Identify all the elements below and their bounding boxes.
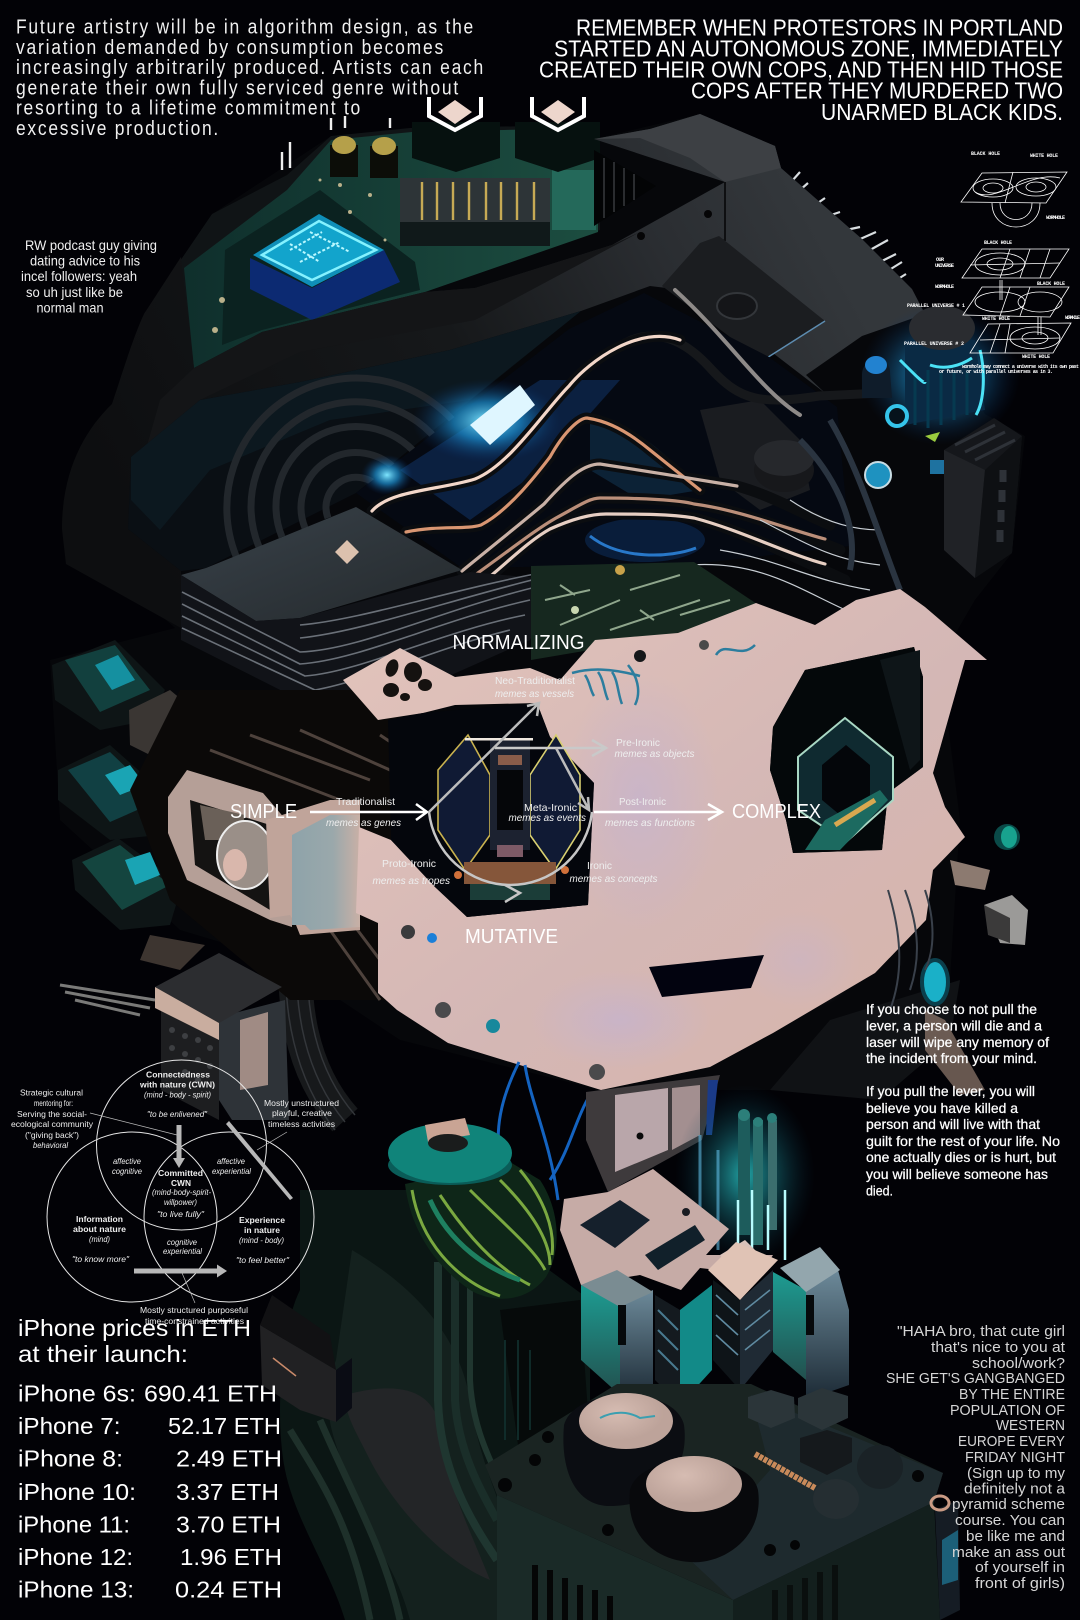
stage labels: memes as functions: [605, 817, 696, 829]
text: haha quote: BY THE ENTIRE: [959, 1386, 1065, 1403]
blue cap: [862, 356, 892, 398]
venn labels: willpower): [164, 1198, 197, 1207]
axis labels: SIMPLE: [230, 801, 297, 823]
text: podcast guy: dating advice to his: [30, 252, 140, 268]
venn labels: in nature: [244, 1225, 280, 1235]
venn labels: Information: [76, 1214, 123, 1224]
venn labels: ("giving back"): [25, 1130, 79, 1140]
text: lever dilemma: guilt for the rest of your life. No: [866, 1134, 1060, 1149]
wormhole diagram: WHITE HOLE: [1030, 153, 1058, 159]
venn labels: "to know more": [72, 1255, 130, 1264]
text: podcast guy: so uh just like be: [26, 284, 123, 300]
wormhole diagram: [904, 151, 1080, 375]
sheet: parallel universe 1: [963, 280, 1069, 317]
stage labels: Ironic: [587, 860, 612, 872]
text: haha quote: FRIDAY NIGHT: [965, 1449, 1065, 1466]
iphone prices list: [18, 1381, 282, 1603]
text: haha quote: of yourself in: [975, 1559, 1065, 1576]
text: future artistry: excessive production.: [16, 118, 220, 140]
text: haha quote: [886, 1323, 1066, 1592]
metal plate: [266, 800, 360, 935]
black cable bundle: [286, 930, 355, 1130]
block 1: [581, 1270, 653, 1400]
venn labels: about nature: [73, 1224, 126, 1234]
venn labels: cognitive: [112, 1167, 142, 1176]
venn labels: affective: [217, 1157, 245, 1166]
text: future artistry: increasingly arbitrarily produced. Artists can each: [16, 57, 485, 79]
blue feather marks: [572, 640, 755, 705]
bottom box with knobs: [485, 1384, 943, 1620]
venn labels: Strategic cultural: [20, 1088, 83, 1098]
heat sink block right: [944, 418, 1022, 578]
venn labels: (mind - body): [239, 1236, 284, 1245]
iphone prices list: iPhone 8:: [18, 1446, 123, 1472]
venn labels: cognitive: [167, 1238, 197, 1247]
capacitors: [330, 136, 398, 178]
iphone prices heading: iPhone prices in ETH: [18, 1315, 251, 1341]
wormhole diagram: BLACK HOLE: [971, 151, 1000, 157]
dark mechanical side: [130, 690, 400, 1000]
mouth: [649, 955, 764, 997]
knob large: [629, 1456, 759, 1562]
iphone prices list: iPhone 6s:: [18, 1381, 136, 1407]
iphone prices list: iPhone 13:: [18, 1577, 134, 1603]
right-side cable ribs: [690, 500, 880, 612]
wormhole diagram: BLACK HOLE: [984, 240, 1012, 246]
venn labels: (mind - body - spirit): [144, 1090, 211, 1100]
plate blots: [383, 657, 432, 701]
text: future artistry: [16, 16, 485, 140]
button plate: [662, 236, 825, 361]
block 4: [773, 1247, 849, 1400]
grey mesh box: [60, 935, 289, 1120]
fin opening: [594, 150, 656, 226]
stage labels: memes as tropes: [372, 875, 451, 887]
axis labels: NORMALIZING: [452, 632, 584, 654]
heat blocks: [581, 1242, 849, 1405]
arrows: [310, 703, 722, 902]
venn labels: mentoring for:: [34, 1098, 73, 1108]
circuit board top: [144, 97, 600, 370]
text: lever dilemma: If you choose to not pull the: [866, 1002, 1037, 1017]
right lower side piece: [931, 1496, 960, 1620]
neck: [586, 1075, 720, 1192]
text: podcast guy: RW podcast guy giving: [25, 237, 157, 253]
text: haha quote: that's nice to you at: [931, 1339, 1066, 1356]
blue canister and ring: [800, 305, 1020, 590]
iphone prices list: 52.17 ETH: [168, 1413, 281, 1439]
text: lever dilemma: If you pull the lever, you will: [866, 1084, 1035, 1099]
venn labels: timeless activities: [268, 1119, 335, 1129]
cyan ring: [887, 406, 907, 426]
text: haha quote: school/work?: [972, 1355, 1065, 1372]
venn labels: "to feel better": [236, 1256, 290, 1265]
stage labels: [326, 675, 696, 887]
stage labels: Neo-Traditionalist: [495, 675, 575, 687]
face rivets: [401, 925, 605, 1080]
iphone prices list: iPhone 10:: [18, 1479, 136, 1505]
venn labels: (mind-body-spirit-: [152, 1188, 211, 1197]
block 2: [655, 1285, 712, 1405]
glowing blue chip: [250, 214, 400, 320]
text: lever dilemma: the incident from your mind.: [866, 1051, 1037, 1066]
dark slot: [222, 190, 420, 345]
copper wires: [372, 290, 881, 580]
chest plate: [560, 1169, 773, 1290]
text: haha quote: pyramid scheme: [952, 1496, 1065, 1513]
text: future artistry: generate their own fully serviced genre without: [16, 77, 460, 99]
venn labels: with nature (CWN): [139, 1080, 215, 1090]
text: lever dilemma: died.: [866, 1184, 893, 1198]
board specks: [212, 178, 386, 353]
stage labels: memes as vessels: [495, 688, 575, 700]
venn labels: experiential: [212, 1167, 251, 1176]
text: haha quote: (Sign up to my: [967, 1465, 1065, 1482]
text: lever dilemma: person and will live with that: [866, 1117, 1040, 1132]
text: podcast guy: normal man: [36, 300, 104, 316]
blue gem: [865, 462, 891, 488]
venn circles: [47, 1060, 314, 1302]
venn labels: CWN: [171, 1178, 191, 1188]
text: haha quote: "HAHA bro, that cute girl: [897, 1323, 1065, 1340]
stage labels: memes as concepts: [570, 873, 658, 885]
text: lever dilemma: laser will wipe any memory of: [866, 1035, 1049, 1050]
side parts lower right: [770, 824, 1028, 1100]
wormhole diagram: WHITE HOLE: [982, 316, 1010, 322]
venn labels: [11, 1070, 339, 1326]
text: haha quote: course. You can: [955, 1512, 1065, 1529]
iphone prices list: iPhone 12:: [18, 1544, 133, 1570]
pins: [282, 116, 390, 170]
venn labels: Experience: [239, 1215, 285, 1225]
lower body: dark green wavy columns: [280, 1190, 590, 1620]
stage labels: Traditionalist: [336, 796, 395, 808]
stage labels: memes as genes: [326, 817, 402, 829]
stage labels: memes as events: [508, 812, 587, 824]
venn arrows: [134, 1121, 293, 1278]
venn labels: playful, creative: [272, 1108, 332, 1118]
venn labels: behavioral: [33, 1141, 68, 1150]
meme diagram: [230, 632, 821, 948]
text: haha quote: definitely not a: [964, 1480, 1066, 1498]
wormhole diagram: UNIVERSE: [935, 263, 954, 269]
wormhole diagram: WHITE HOLE: [1022, 354, 1050, 360]
text: haha quote: be like me and: [966, 1528, 1065, 1545]
glowing cyan columns: [675, 1085, 815, 1265]
iphone prices list: 3.70 ETH: [176, 1512, 281, 1538]
left circuit boards: [52, 640, 200, 930]
stage labels: Pre-Ironic: [616, 737, 660, 749]
iphone prices heading: [18, 1315, 251, 1367]
venn labels: "to live fully": [157, 1210, 205, 1219]
helmet band: [62, 114, 925, 628]
stage labels: Post-Ironic: [619, 796, 666, 808]
text: future artistry: Future artistry will be in algorithm design, as the: [16, 16, 475, 38]
coil with green wires: [388, 1118, 557, 1299]
wormhole diagram: WORMHOLE: [1065, 315, 1080, 321]
venn labels: "to be enlivened": [147, 1110, 208, 1119]
text: portland headline: [539, 15, 1063, 125]
iphone prices list: 0.24 ETH: [175, 1577, 282, 1603]
venn labels: ecological community: [11, 1119, 94, 1129]
text: haha quote: SHE GET'S GANGBANGED: [886, 1370, 1065, 1387]
left eye circuitry: [388, 703, 594, 917]
iphone prices list: 2.49 ETH: [176, 1446, 282, 1472]
text: lever dilemma: lever, a person will die and a: [866, 1019, 1042, 1034]
cavity with blue glow: [356, 293, 850, 568]
text: lever dilemma: [866, 1002, 1060, 1198]
wormhole diagram: BLACK HOLE: [1037, 281, 1065, 287]
gold pins: [400, 178, 550, 222]
venn labels: Mostly structured purposeful: [140, 1305, 248, 1315]
ribbed block: [181, 572, 560, 722]
text: haha quote: make an ass out: [952, 1544, 1066, 1561]
main dark silhouette: [50, 114, 1025, 1090]
pink face plate: [343, 589, 987, 1090]
venn labels: time-constrained activities: [145, 1316, 244, 1326]
knob small: [563, 1393, 685, 1506]
venn labels: experiential: [163, 1247, 202, 1256]
text: lever dilemma: you will believe someone has: [866, 1167, 1048, 1182]
text: future artistry: resorting to a lifetime commitment to: [16, 98, 362, 120]
cylinder housing: [168, 770, 292, 927]
text: future artistry: variation demanded by consumption becomes: [16, 37, 445, 59]
iphone prices list: iPhone 7:: [18, 1413, 120, 1439]
mid circuit board: [531, 562, 760, 660]
iphone prices list: 690.41 ETH: [144, 1381, 277, 1407]
venn labels: Connectedness: [146, 1070, 210, 1080]
text: haha quote: front of girls): [975, 1575, 1065, 1592]
iphone prices list: 3.37 ETH: [176, 1479, 279, 1505]
top plate of ribbed block: [181, 507, 462, 621]
wormhole diagram: PARALLEL UNIVERSE # 2: [904, 341, 964, 347]
venn labels: Serving the social-: [17, 1109, 87, 1119]
iphone prices list: iPhone 11:: [18, 1512, 130, 1538]
wormhole diagram: WORMHOLE: [935, 284, 954, 290]
axis labels: [230, 632, 821, 948]
ribbed fan: [128, 311, 581, 571]
venn labels: (mind): [89, 1235, 110, 1244]
text: podcast guy: incel followers: yeah: [21, 268, 137, 284]
venn labels: affective: [113, 1157, 141, 1166]
iphone prices heading: at their launch:: [18, 1341, 188, 1367]
sheet: wormhole loop: [961, 172, 1067, 227]
stage labels: memes as objects: [614, 748, 695, 760]
axis labels: MUTATIVE: [465, 926, 558, 948]
lavender face shading: [530, 670, 860, 1070]
right eye circuitry: [770, 647, 923, 853]
blue wires: [498, 1062, 590, 1200]
text: lever dilemma: believe you have killed a: [866, 1101, 1018, 1116]
sheet: our universe: [962, 249, 1069, 278]
axis labels: COMPLEX: [732, 801, 821, 823]
venn labels: Committed: [158, 1168, 203, 1178]
black box device: [260, 1295, 352, 1422]
venn diagram: [11, 1060, 339, 1326]
text: podcast guy: [21, 237, 157, 316]
text: lever dilemma: one actually dies or is hurt, but: [866, 1150, 1056, 1165]
iphone prices list: 1.96 ETH: [180, 1544, 282, 1570]
wormhole diagram: or future, or with parallel universes as in 3.: [939, 369, 1053, 375]
stage labels: Proto-Ironic: [382, 858, 436, 870]
wormhole diagram: OUR: [936, 257, 944, 263]
sheet: parallel universe 2: [970, 317, 1071, 353]
zebra fins on the right: [792, 172, 908, 296]
stage labels: Meta-Ironic: [524, 802, 577, 814]
text: haha quote: EUROPE EVERY: [958, 1433, 1065, 1450]
venn labels: Mostly unstructured: [264, 1098, 339, 1108]
text: portland headline: UNARMED BLACK KIDS.: [821, 99, 1063, 125]
text: haha quote: POPULATION OF: [950, 1402, 1065, 1419]
block 3: [708, 1242, 778, 1390]
heat sinks with chevrons: [412, 97, 600, 172]
wormhole diagram: PARALLEL UNIVERSE # 1: [907, 303, 965, 309]
text: haha quote: WESTERN: [996, 1417, 1065, 1434]
wormhole diagram: WORMHOLE: [1046, 215, 1065, 221]
wormhole diagram: wormhole may connect a universe with its own past: [962, 364, 1079, 370]
